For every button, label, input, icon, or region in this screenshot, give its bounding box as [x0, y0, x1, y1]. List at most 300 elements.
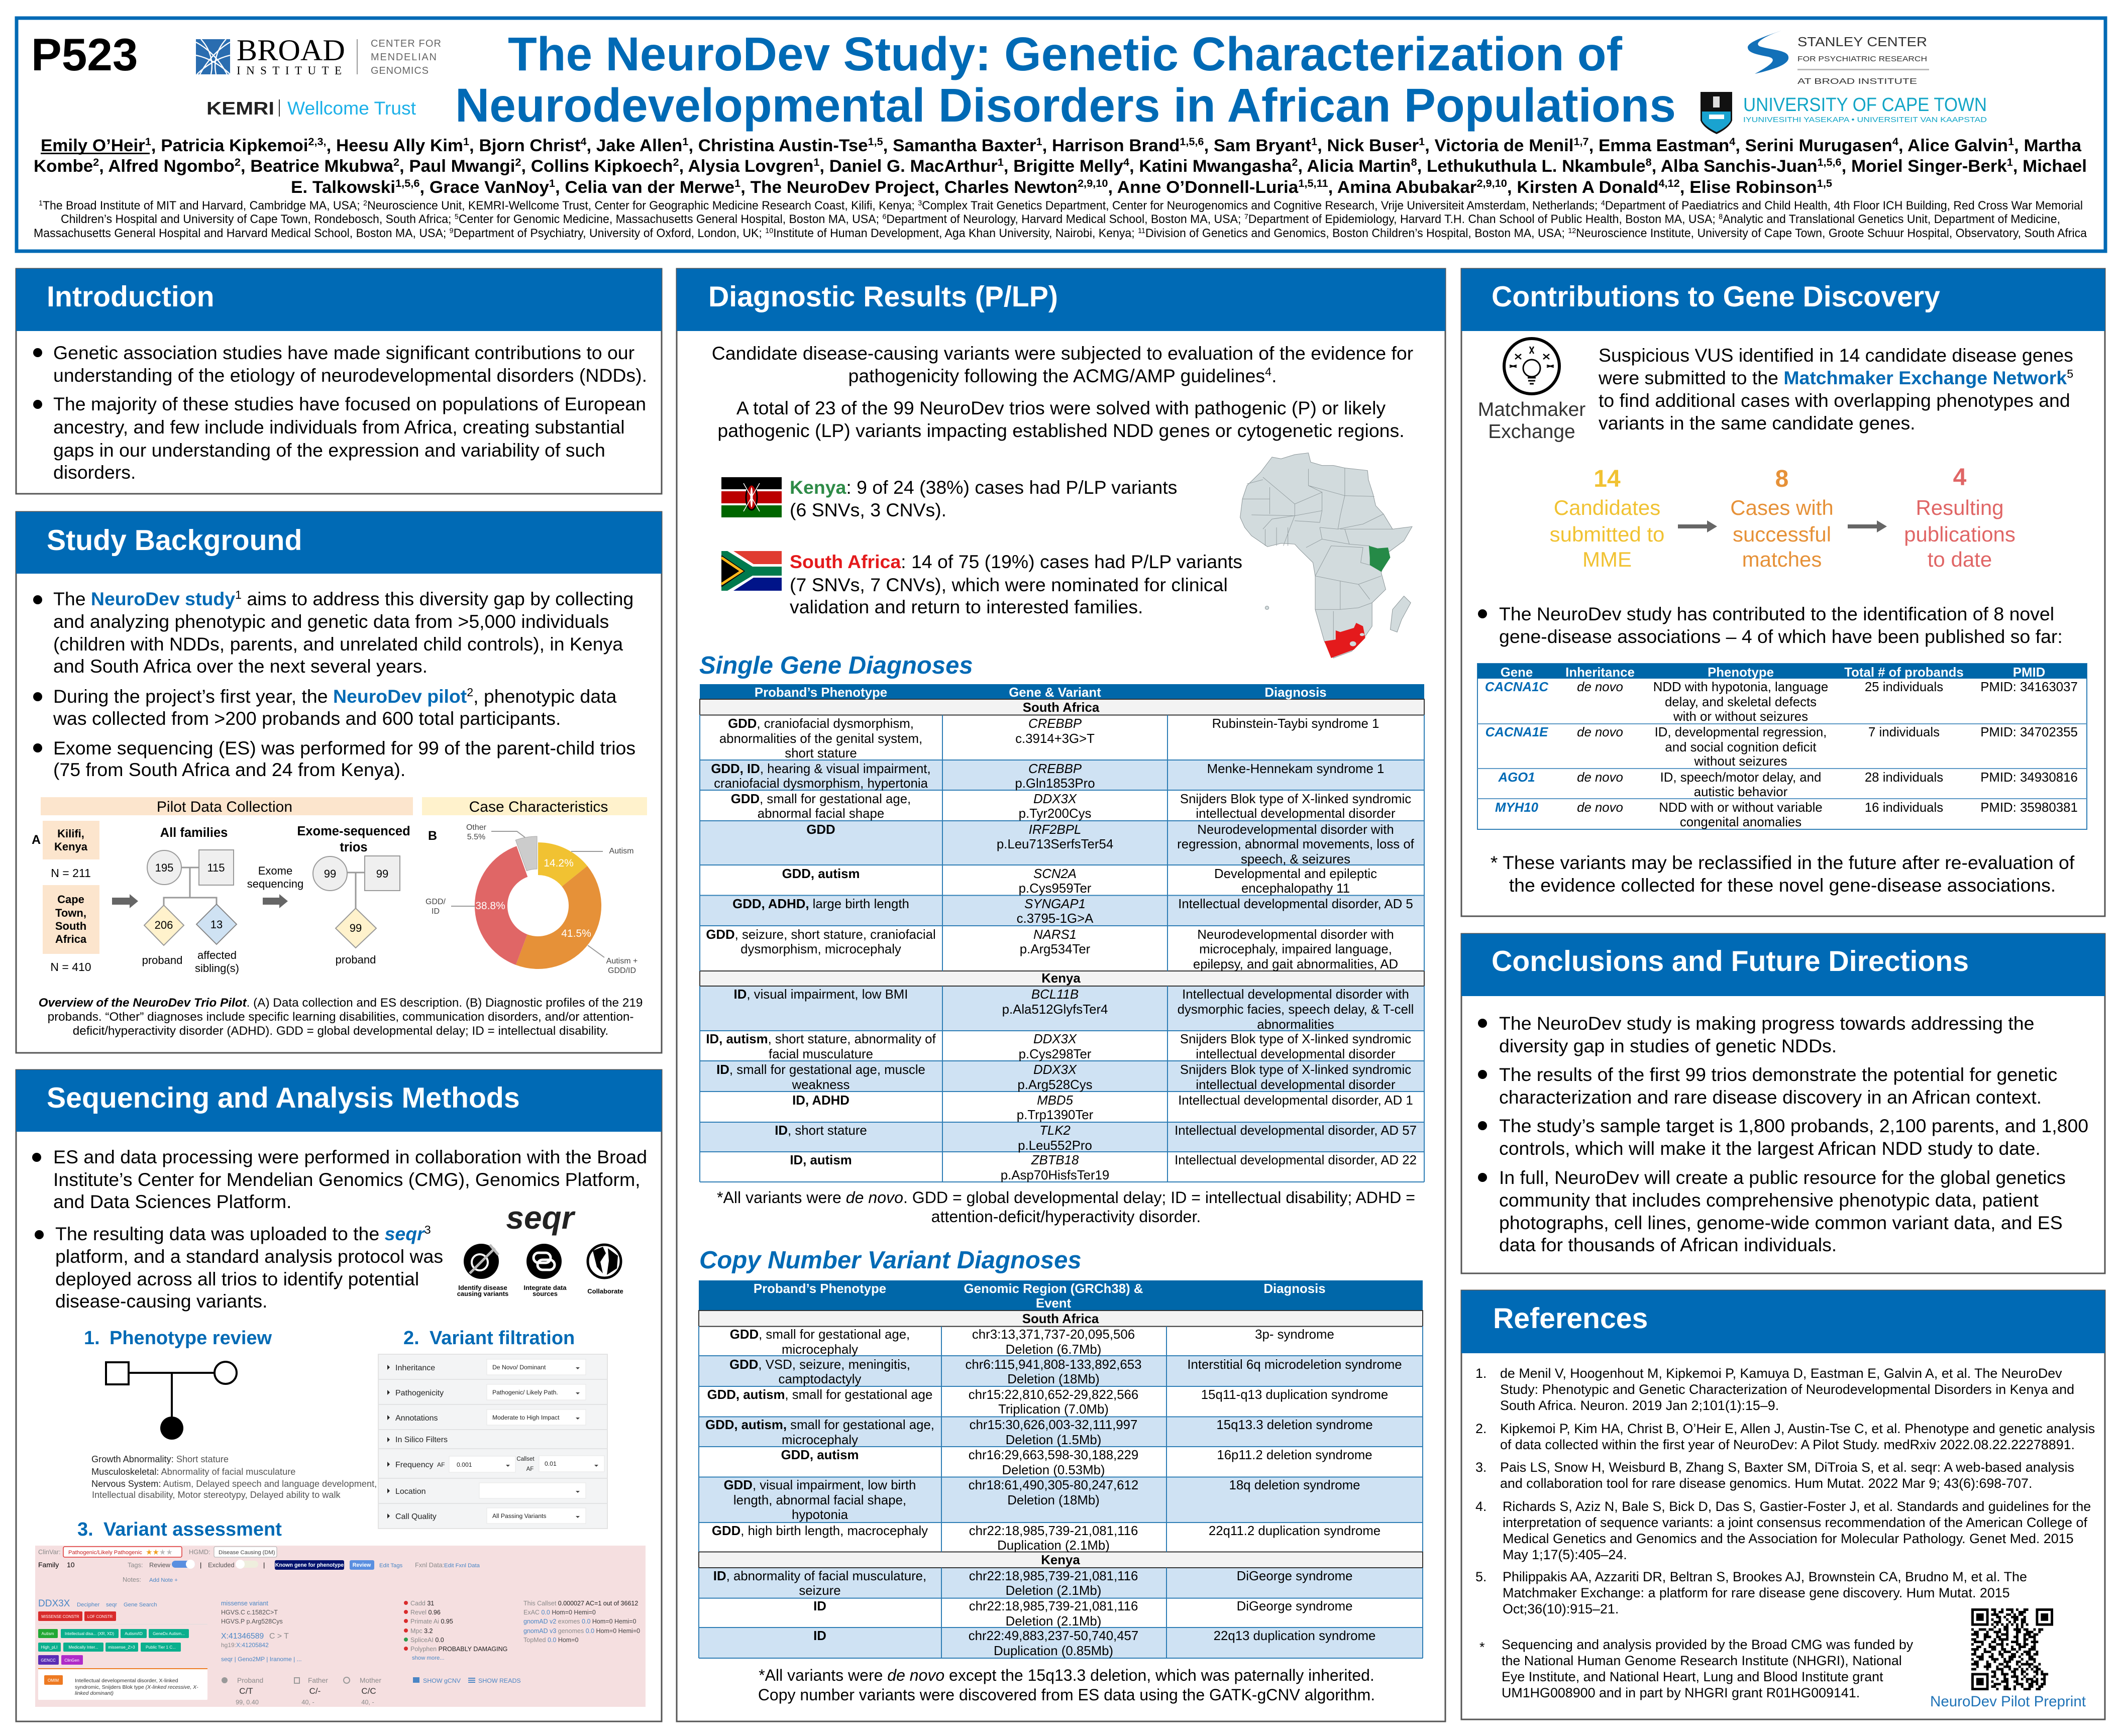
- heading: Study Background: [16, 512, 662, 574]
- footnote: single gene table: [717, 1188, 1415, 1226]
- table: single gene diagnoses: GDD, seizure, short stature, craniofacial: [706, 928, 936, 942]
- reference list: 4.: [1475, 1499, 1487, 1514]
- table: copy number variant diagnoses: ID: [813, 1599, 826, 1613]
- text: South Africa results: (7 SNVs, 7 CNVs), which were nominated for clinical: [790, 574, 1228, 595]
- seqr variant screenshot: Cadd 31: [410, 1600, 434, 1607]
- panel: Conclusions and Future Directions: [1461, 934, 2105, 1273]
- figure A: pilot data collection: N = 211: [51, 866, 91, 880]
- seqr variant screenshot: Review: [353, 1562, 371, 1568]
- affiliations: Massachusetts General Hospital and Harvard Medical School, Boston MA, USA; 9Department of Psychiatry, University of Oxford, London, UK; 10Institute of Human Development, Aga Khan University, Nairobi, Kenya; 11Division of Genetics and Genomics, Boston Children’s Hospital, Boston MA, USA; 12Neuroscience Institute, University of Cape Town, Groote Schuur Hospital, Observatory, South Africa: [34, 227, 2087, 240]
- seqr variant screenshot: Tags:: [128, 1561, 143, 1569]
- logo: KEMRI Wellcome Trust: KEMRI: [206, 98, 274, 119]
- table: single gene diagnoses: DDX3X: [1033, 792, 1078, 806]
- bullet list: disorders.: [53, 462, 136, 483]
- seqr variant screenshot: gnomAD v2 exomes 0.0 Hom=0 Hemi=0: [523, 1618, 636, 1625]
- bullet list: (children with NDDs, parents, and unrelated child controls), in Kenya: [53, 633, 623, 655]
- table: novel gene-disease associations: ID, developmental regression,: [1655, 725, 1827, 739]
- table: copy number variant diagnoses: South Africa: [1022, 1312, 1099, 1326]
- table: novel gene-disease associations: Phenotype: [1708, 666, 1774, 680]
- table: single gene diagnoses: GDD, craniofacial dysmorphism,: [728, 717, 914, 731]
- seqr variant screenshot: TopMed 0.0 Hom=0: [523, 1637, 579, 1644]
- table: single gene diagnoses: SYNGAP1: [1024, 897, 1086, 911]
- seqr variant screenshot: Gene Search: [124, 1602, 157, 1608]
- funding note: UM1HG008900 and in part by NHGRI grant R01HG009141.: [1502, 1685, 1860, 1700]
- table: novel gene-disease associations: de novo: [1577, 680, 1623, 694]
- figure B: case characteristics donut chart: [422, 797, 647, 975]
- intro text: [712, 343, 1413, 441]
- seqr variant screenshot: syndromic, Snijders Blok type (X-linked recessive, X-: [75, 1684, 198, 1690]
- bullet list: During the project’s first year, the NeuroDev pilot2, phenotypic data: [53, 686, 616, 707]
- figure A: pilot data collection: South: [55, 920, 86, 932]
- intro text: pathogenic (LP) variants impacting established NDD genes or cytogenetic regions.: [717, 420, 1405, 441]
- table: novel gene-disease associations: 7 individuals: [1868, 725, 1940, 739]
- logo: KEMRI Wellcome Trust: [206, 98, 416, 119]
- seqr variant screenshot: Family: [38, 1561, 59, 1569]
- bullet list: and South Africa over the next several years.: [53, 656, 428, 677]
- seqr variant screenshot: C/C: [361, 1686, 376, 1696]
- table: single gene diagnoses: intellectual developmental disorder: [1196, 807, 1396, 821]
- bullet list: [1478, 1013, 2088, 1255]
- step 3: variant assessment: Variant assessment: [103, 1519, 282, 1540]
- logo: Broad Institute CMG: INSTITUTE: [237, 64, 342, 77]
- filter form: Location: [395, 1487, 426, 1496]
- figure B: case characteristics donut chart: 5.5%: [467, 833, 485, 841]
- bullet list: data for thousands of African individuals.: [1499, 1234, 1837, 1255]
- seqr variant screenshot: ClinVar:: [38, 1548, 61, 1556]
- table: novel gene-disease associations: Total # of probands: [1844, 666, 1964, 680]
- table: novel gene-disease associations: delay, and skeletal defects: [1665, 695, 1817, 709]
- reference list: interpretation of sequence variants: a joint consensus recommendation of the American College of: [1503, 1515, 2087, 1530]
- seqr variant screenshot: Decipher: [77, 1602, 99, 1608]
- figure B: case characteristics donut chart: Other: [466, 823, 487, 832]
- footnote: CNV table: Copy number variants were discovered from ES data using the GATK-gCNV algorithm.: [758, 1686, 1375, 1704]
- authors: Kombe2, Alfred Ngombo2, Beatrice Mkubwa2, Paul Mwangi2, Collins Kipkoech2, Alysia Lovgren1, Daniel G. MacArthur1, Brigitte Melly4, Katini Mwangasha2, Alicia Martin8, Lethukuthula L. Nkambule8, Alba Sanchis-Juan1,5,6, Moriel Singer-Berk1, Michael: [34, 156, 2087, 176]
- table: novel gene-disease associations: de novo: [1577, 725, 1623, 739]
- bullet: ES and data processing: [32, 1146, 647, 1212]
- table: novel gene-disease associations: NDD with hypotonia, language: [1653, 680, 1828, 694]
- step 2: variant filtration: 2.: [403, 1328, 419, 1349]
- seqr variant screenshot: seqr: [106, 1602, 117, 1608]
- heading: Study Background: Study Background: [47, 524, 302, 557]
- figure A: pilot data collection: [32, 797, 413, 974]
- table: single gene diagnoses: Neurodevelopmental disorder with: [1197, 823, 1394, 837]
- reference list: 1.: [1475, 1366, 1487, 1381]
- logo: Matchmaker Exchange: Matchmaker: [1478, 399, 1585, 420]
- table: copy number variant diagnoses: ID: [813, 1629, 826, 1643]
- table: copy number variant diagnoses: chr18:61,490,305-80,247,612: [969, 1478, 1138, 1492]
- seqr variant screenshot: [35, 1546, 646, 1707]
- table: single gene diagnoses: p.Gln1853Pro: [1015, 777, 1095, 791]
- table: copy number variant diagnoses: 18q deletion syndrome: [1229, 1478, 1360, 1492]
- bullet list: diversity gap in studies of genetic NDDs.: [1499, 1035, 1837, 1056]
- logo: University of Cape Town: UNIVERSITY OF CAPE TOWN: [1743, 94, 1987, 116]
- icon: collaborate globe: Collaborate: [587, 1287, 623, 1295]
- table: copy number variant diagnoses: Deletion (18Mb): [1007, 1493, 1100, 1507]
- seqr variant screenshot: Public Tier 1 C...: [146, 1645, 176, 1650]
- table: copy number variant diagnoses: 15q13.3 deletion syndrome: [1216, 1418, 1373, 1432]
- figure A: pilot data collection: 206: [155, 919, 173, 931]
- table: novel gene-disease associations: MYH10: [1495, 801, 1539, 815]
- stat: 8 cases: [1730, 466, 1834, 571]
- bullet: seqr platform: deployed across all trios to identify potential: [55, 1268, 419, 1289]
- seqr variant screenshot: SHOW gCNV: [423, 1677, 461, 1684]
- figure A: pilot data collection: 99: [324, 867, 336, 880]
- table: copy number variant diagnoses: length, abnormal facial shape,: [733, 1493, 906, 1507]
- figure A: pilot data collection: 195: [155, 861, 173, 874]
- figure B: case characteristics donut chart: GDD/ID: [608, 966, 636, 975]
- stat: 4 publications: to date: [1928, 548, 1992, 571]
- seqr variant screenshot: OMIM: [48, 1678, 59, 1683]
- table: copy number variant diagnoses: [699, 1280, 1423, 1658]
- intro text: A total of 23 of the 99 NeuroDev trios were solved with pathogenic (P) or likely: [736, 397, 1386, 418]
- table: single gene diagnoses: speech, & seizures: [1241, 852, 1350, 866]
- table: single gene diagnoses: ID, short stature: [775, 1124, 867, 1138]
- text: Kenya results: [790, 477, 1177, 520]
- table: copy number variant diagnoses: GDD, VSD, seizure, meningitis,: [729, 1358, 910, 1372]
- funding note: [1479, 1637, 1914, 1700]
- table: single gene diagnoses: p.Cys298Ter: [1019, 1047, 1092, 1061]
- table: novel gene-disease associations: and social cognition deficit: [1665, 740, 1817, 754]
- logo: Broad Institute CMG: BROAD: [237, 34, 345, 67]
- icon: collaborate globe: [587, 1245, 623, 1295]
- seqr variant screenshot: 99, 0.40: [236, 1699, 259, 1706]
- logo: Matchmaker Exchange: Exchange: [1488, 421, 1575, 443]
- logo: KEMRI Wellcome Trust: Wellcome Trust: [287, 98, 416, 119]
- stat: 14 candidates: 14: [1594, 466, 1621, 492]
- logo: seqr: seqr: [506, 1200, 576, 1236]
- filter form: Pathogenic/ Likely Path.: [492, 1389, 558, 1396]
- table: copy number variant diagnoses: Duplication (0.85Mb): [994, 1644, 1113, 1658]
- reference list: 3.: [1475, 1460, 1487, 1475]
- stat: 8 cases: 8: [1775, 466, 1788, 492]
- table: single gene diagnoses: ID, autism, short stature, abnormality of: [706, 1032, 936, 1046]
- footnote: reclassification: [1491, 852, 2075, 896]
- seqr variant screenshot: ClinGen: [64, 1658, 79, 1663]
- seqr variant screenshot: linked dominant): [75, 1690, 114, 1696]
- bullet list: community that includes comprehensive phenotypic data, patient: [1499, 1189, 2039, 1211]
- QR code: [1971, 1609, 2052, 1689]
- table: copy number variant diagnoses: chr6:115,941,808-133,892,653: [966, 1358, 1141, 1372]
- seqr variant screenshot: X:41346589: [221, 1632, 264, 1641]
- seqr variant screenshot: HGVS.P p.Arg528Cys: [221, 1618, 283, 1625]
- seqr variant screenshot: hg19:X:41205842: [221, 1642, 269, 1649]
- seqr variant screenshot: Medically Inter...: [68, 1645, 98, 1650]
- table: novel gene-disease associations: ID, speech/motor delay, and: [1660, 771, 1821, 785]
- filter form: 0.001: [457, 1461, 472, 1468]
- text: Kenya results: (6 SNVs, 3 CNVs).: [790, 499, 946, 520]
- affiliations: [34, 199, 2087, 240]
- table: novel gene-disease associations: CACNA1E: [1486, 725, 1548, 739]
- heading: Conclusions and Future Directions: Conclusions and Future Directions: [1492, 945, 1969, 978]
- table: copy number variant diagnoses: GDD, autism, small for gestational age: [707, 1388, 932, 1402]
- table: copy number variant diagnoses: 22q13 duplication syndrome: [1214, 1629, 1375, 1643]
- heading: Single Gene Diagnoses: Single Gene Diagnoses: [699, 652, 973, 679]
- table: single gene diagnoses: ID, small for gestational age, muscle: [716, 1063, 925, 1077]
- table: novel gene-disease associations: Inheritance: [1565, 666, 1635, 680]
- filter form: De Novo/ Dominant: [492, 1364, 546, 1371]
- table: copy number variant diagnoses: GDD, high birth length, macrocephaly: [712, 1524, 928, 1538]
- bullet list: The results of the first 99 trios demonstrate the potential for genetic: [1499, 1064, 2057, 1085]
- table: novel gene-disease associations: without seizures: [1694, 754, 1787, 769]
- seqr variant screenshot: Revel 0.96: [410, 1609, 441, 1616]
- stat: 4 publications: publications: [1904, 522, 2015, 546]
- bullet: ES and data processing: Institute’s Center for Mendelian Genomics (CMG), Genomics Platform,: [53, 1169, 641, 1190]
- table: single gene diagnoses: p.Arg528Cys: [1017, 1078, 1093, 1092]
- stat: 8 cases: successful: [1733, 522, 1831, 546]
- reference list: and collaboration tool for rare disease genomics. Hum Mutat. 2022 Mar 9; 43(6):698-707.: [1500, 1476, 2032, 1491]
- intro text: pathogenicity following the ACMG/AMP guidelines4.: [848, 365, 1277, 386]
- stat: 4 publications: [1904, 464, 2015, 571]
- table: single gene diagnoses: regression, abnormal movements, loss of: [1177, 837, 1415, 851]
- bullet list: Exome sequencing (ES) was performed for 99 of the parent-child trios: [53, 737, 635, 758]
- table: copy number variant diagnoses: 3p- syndrome: [1255, 1328, 1334, 1342]
- table: copy number variant diagnoses: chr22:18,985,739-21,081,116: [969, 1569, 1138, 1583]
- arrow: [1848, 520, 1887, 532]
- table: copy number variant diagnoses: Proband’s Phenotype: [754, 1282, 886, 1296]
- reference list: Kipkemoi P, Kim HA, Christ B, O’Heir E, Allen J, Austin-Tse C, et al. Phenotype and genetic analysis: [1500, 1421, 2095, 1436]
- table: copy number variant diagnoses: chr3:13,371,737-20,095,506: [972, 1328, 1135, 1342]
- seqr variant screenshot: Excluded: [208, 1561, 235, 1569]
- table: copy number variant diagnoses: Deletion (18Mb): [1007, 1372, 1100, 1386]
- icon: Kenya flag: [721, 477, 782, 517]
- table: copy number variant diagnoses: Deletion (6.7Mb): [1006, 1343, 1101, 1357]
- logo: Stanley Center: AT BROAD INSTITUTE: [1797, 77, 1917, 86]
- intro text: Candidate disease-causing variants were subjected to evaluation of the evidence for: [712, 343, 1413, 364]
- table: single gene diagnoses: Snijders Blok type of X-linked syndromic: [1180, 1063, 1411, 1077]
- table: novel gene-disease associations: PMID: 34163037: [1980, 680, 2078, 694]
- figure B: case characteristics donut chart: Autism: [609, 847, 633, 855]
- table: copy number variant diagnoses: DiGeorge syndrome: [1237, 1599, 1352, 1613]
- heading: Diagnostic Results: [677, 269, 1445, 331]
- icon: identify disease causing variants: causing variants: [457, 1290, 508, 1297]
- poster header: [17, 18, 2105, 251]
- funding note: the National Human Genome Research Institute (NHGRI), National: [1502, 1653, 1902, 1668]
- seqr variant screenshot: Mother: [360, 1677, 381, 1684]
- bullet: ES and data processing: ES and data processing were performed in collaboration with the Broad: [53, 1146, 647, 1167]
- seqr variant screenshot: GENCC: [41, 1658, 56, 1663]
- filter form: 0.01: [545, 1460, 557, 1467]
- table: single gene diagnoses: Snijders Blok type of X-linked syndromic: [1180, 1032, 1411, 1046]
- table: novel gene-disease associations: 16 individuals: [1865, 801, 1943, 815]
- filter form: Pathogenicity: [395, 1389, 444, 1397]
- seqr variant screenshot: |: [263, 1561, 265, 1569]
- table: copy number variant diagnoses: camptodactyly: [779, 1372, 862, 1386]
- text: Matchmaker description: were submitted to the Matchmaker Exchange Network5: [1598, 367, 2073, 388]
- table: novel gene-disease associations: Gene: [1501, 666, 1533, 680]
- table: single gene diagnoses: DDX3X: [1033, 1063, 1078, 1077]
- table: single gene diagnoses: [700, 684, 1424, 1182]
- reference list: Matchmaker Exchange: a platform for rare disease gene discovery. Hum Mutat. 2015: [1503, 1585, 2010, 1600]
- table: copy number variant diagnoses: chr22:18,985,739-21,081,116: [969, 1524, 1138, 1538]
- logo: Matchmaker Exchange: [1478, 339, 1585, 443]
- seqr variant screenshot: Fxnl Data:: [415, 1561, 444, 1569]
- reference list: Philippakis AA, Azzariti DR, Beltran S, Brookes AJ, Brownstein CA, Brudno M, et al. The: [1503, 1569, 2027, 1584]
- bullet: seqr platform: disease-causing variants.: [55, 1290, 267, 1312]
- reference list: Richards S, Aziz N, Bale S, Bick D, Das S, Gastier-Foster J, et al. Standards and guidelines for the: [1503, 1499, 2091, 1514]
- bullet list: Genetic association studies have made significant contributions to our: [53, 342, 634, 363]
- seqr variant screenshot: Pathogenic/Likely Pathogenic: [68, 1550, 142, 1556]
- table: single gene diagnoses: weakness: [792, 1078, 850, 1092]
- table: novel gene-disease associations: PMID: 35980381: [1980, 801, 2078, 815]
- seqr variant screenshot: 10: [67, 1561, 75, 1569]
- seqr variant screenshot: ExAC 0.0 Hom=0 Hemi=0: [523, 1609, 596, 1616]
- table: single gene diagnoses: Kenya: [1041, 971, 1081, 986]
- table: single gene diagnoses: DDX3X: [1033, 1032, 1078, 1046]
- seqr variant screenshot: Mpc 3.2: [410, 1627, 433, 1635]
- table: single gene diagnoses: dysmorphic facies, speech delay, & T-cell: [1178, 1003, 1414, 1017]
- seqr variant screenshot: missense_Z>3: [108, 1645, 135, 1650]
- table: single gene diagnoses: MBD5: [1037, 1094, 1073, 1108]
- table: copy number variant diagnoses: Deletion (2.1Mb): [1006, 1584, 1101, 1598]
- icon: identify disease causing variants: Identify disease: [458, 1284, 507, 1291]
- bullet list: The NeuroDev study is making progress towards addressing the: [1499, 1013, 2034, 1034]
- table: novel gene-disease associations: autistic behavior: [1694, 785, 1788, 799]
- seqr variant screenshot: Edit Fxnl Data: [444, 1563, 480, 1569]
- seqr variant screenshot: Primate Ai 0.95: [410, 1618, 453, 1625]
- phenotype description: [91, 1454, 377, 1500]
- seqr variant screenshot: Autism: [41, 1632, 54, 1636]
- filter form: Frequency: [395, 1461, 434, 1469]
- seqr variant screenshot: GeneDx Autism...: [153, 1632, 185, 1636]
- step 1: phenotype review: Phenotype review: [110, 1328, 272, 1349]
- seqr variant screenshot: Disease Causing (DM): [219, 1550, 275, 1556]
- figure A: pilot data collection: Africa: [55, 933, 87, 945]
- text: Kenya results: Kenya: 9 of 24 (38%) cases had P/LP variants: [790, 477, 1177, 498]
- table: single gene diagnoses: p.Arg534Ter: [1020, 942, 1091, 956]
- affiliations: Children’s Hospital and University of Cape Town, Rondebosch, South Africa; 5Center for Genomic Medicine, Massachusetts General Hospital, Boston MA, USA; 6Department of Neurology, Harvard Medical School, Boston MA, USA; 7Department of Epidemiology, Harvard T.H. Chan School of Public Health, Boston MA, USA; 8Analytic and Translational Genetics Unit, Department of Medicine,: [61, 212, 2060, 226]
- bullet list: was collected from >200 probands and 600 total participants.: [53, 708, 561, 729]
- table: single gene diagnoses: GDD, small for gestational age,: [731, 792, 911, 806]
- funding note: Eye Institute, and National Heart, Lung and Blood Institute grant: [1502, 1669, 1883, 1684]
- table: single gene diagnoses: SCN2A: [1033, 867, 1077, 881]
- figure caption: Overview of the NeuroDev Trio Pilot. (A) Data collection and ES description. (B) Diagnostic profiles of the 219: [39, 996, 643, 1010]
- bullet list: The NeuroDev study1 aims to address this diversity gap by collecting: [53, 588, 633, 609]
- table: single gene diagnoses: GDD, autism: [782, 867, 860, 881]
- seqr variant screenshot: LOF CONSTR: [87, 1614, 113, 1619]
- seqr variant screenshot: 40, -: [301, 1699, 314, 1706]
- seqr variant screenshot: Known gene for phenotype: [275, 1562, 344, 1568]
- figure A: pilot data collection: proband: [336, 953, 376, 966]
- table: single gene diagnoses: dysmorphism, microcephaly: [740, 942, 901, 956]
- table: copy number variant diagnoses: Deletion (2.1Mb): [1006, 1614, 1101, 1629]
- seqr variant screenshot: High_pLI: [41, 1645, 57, 1650]
- table: copy number variant diagnoses: microcephaly: [782, 1343, 858, 1357]
- table: single gene diagnoses: BCL11B: [1031, 988, 1079, 1002]
- bullet: novel associations: The NeuroDev study has contributed to the identification of 8 novel: [1499, 603, 2054, 624]
- table: copy number variant diagnoses: Interstitial 6q microdeletion syndrome: [1187, 1358, 1402, 1372]
- heading: Diagnostic Results: Diagnostic Results (P/LP): [708, 281, 1058, 313]
- seqr variant screenshot: seqr | Geno2MP | Iranome | ...: [221, 1656, 302, 1663]
- figure B: case characteristics donut chart: ID: [432, 907, 440, 916]
- table: novel gene-disease associations: PMID: 34930816: [1980, 771, 2078, 785]
- table: copy number variant diagnoses: GDD, visual impairment, low birth: [724, 1478, 916, 1492]
- heading: Contributions to Gene Discovery: Contributions to Gene Discovery: [1492, 281, 1940, 313]
- heading: Copy Number Variant Diagnoses: Copy Number Variant Diagnoses: [699, 1247, 1082, 1274]
- text: Matchmaker description: [1598, 345, 2073, 433]
- table: single gene diagnoses: ID, ADHD: [792, 1094, 850, 1108]
- seqr variant screenshot: Father: [308, 1677, 328, 1684]
- table: copy number variant diagnoses: GDD, small for gestational age,: [730, 1328, 910, 1342]
- figure A: pilot data collection: sequencing: [247, 878, 303, 890]
- table: copy number variant diagnoses: hypotonia: [792, 1508, 848, 1522]
- logo: Stanley Center: STANLEY CENTER: [1797, 34, 1927, 49]
- figure A: pilot data collection: A: [32, 833, 41, 847]
- reference list: [1475, 1366, 2095, 1616]
- bullet list: characterization and rare disease discovery in an African context.: [1499, 1087, 2042, 1108]
- figure B: case characteristics donut chart: B: [428, 829, 437, 843]
- filter form: Inheritance: [395, 1364, 435, 1372]
- table: single gene diagnoses: Intellectual developmental disorder with: [1182, 988, 1409, 1002]
- table: copy number variant diagnoses: chr16:29,663,598-30,188,229: [969, 1448, 1138, 1462]
- title: Neurodevelopmental Disorders in African Populations: [455, 79, 1676, 132]
- table: single gene diagnoses: Intellectual developmental disorder, AD 22: [1175, 1153, 1417, 1167]
- seqr variant screenshot: MISSENSE CONSTR: [41, 1614, 79, 1619]
- panel: Diagnostic Results: [677, 269, 1445, 1721]
- table: single gene diagnoses: abnormal facial shape: [758, 807, 884, 821]
- text: Matchmaker description: Suspicious VUS identified in 14 candidate disease genes: [1599, 345, 2073, 366]
- table: novel gene-disease associations: AGO1: [1498, 771, 1535, 785]
- seqr variant screenshot: gnomAD v3 genomes 0.0 Hom=0 Hemi=0: [523, 1627, 640, 1635]
- table: copy number variant diagnoses: Deletion (0.53Mb): [1002, 1463, 1105, 1477]
- bullet list: (75 from South Africa and 24 from Kenya).: [53, 759, 405, 780]
- seqr variant screenshot: SHOW READS: [478, 1677, 521, 1684]
- seqr variant screenshot: Proband: [237, 1677, 263, 1684]
- table: copy number variant diagnoses: chr15:22,810,652-29,822,566: [969, 1388, 1138, 1402]
- table: single gene diagnoses: p.Tyr200Cys: [1019, 807, 1091, 821]
- seqr variant screenshot: Autism/ID: [125, 1632, 143, 1636]
- table: copy number variant diagnoses: Triplication (7.0Mb): [998, 1402, 1109, 1417]
- seqr variant screenshot: show more...: [412, 1655, 445, 1661]
- table: single gene diagnoses: GDD, ADHD, large birth length: [732, 897, 909, 911]
- figure A: pilot data collection: Pilot Data Collection: [157, 799, 292, 815]
- heading: Introduction: Introduction: [47, 281, 215, 313]
- table: copy number variant diagnoses: chr22:49,883,237-50,740,457: [969, 1629, 1138, 1643]
- seqr variant screenshot: DDX3X: [38, 1598, 70, 1609]
- panel: Contributions to Gene Discovery: [1461, 269, 2105, 916]
- authors: E. Talkowski1,5,6, Grace VanNoy1, Celia van der Merwe 1, The NeuroDev Project, Charles Newton 2,9,10, Anne O’Donnell-Luria 1,5,11, Amina Abubakar2,9,10, Kirsten A Donald4,12, Elise Robinson1,5: [291, 177, 1832, 197]
- seqr variant screenshot: Add Note +: [149, 1577, 178, 1583]
- figure A: pilot data collection: Exome-sequenced: [297, 824, 410, 838]
- figure A: pilot data collection: sibling(s): [195, 962, 239, 974]
- table: single gene diagnoses: NARS1: [1033, 928, 1077, 942]
- table: copy number variant diagnoses: chr15:30,626,003-32,111,997: [970, 1418, 1137, 1432]
- bullet list: gaps in our understanding of the expression and variability of such: [53, 440, 605, 461]
- filter form: AF: [437, 1461, 445, 1468]
- figure A: pilot data collection: affected: [197, 949, 237, 961]
- table: single gene diagnoses: p.Asp70HisfsTer19: [1001, 1168, 1109, 1182]
- table: single gene diagnoses: abnormalities: [1257, 1018, 1334, 1032]
- filter form: Annotations: [395, 1414, 438, 1423]
- panel: Introduction: [16, 269, 662, 494]
- table: single gene diagnoses: p.Ala512GlyfsTer4: [1002, 1003, 1108, 1017]
- panel: Study Background: [16, 512, 662, 1053]
- seqr variant screenshot: missense variant: [221, 1600, 268, 1607]
- seqr variant screenshot: HGVS.C c.1582C>T: [221, 1609, 278, 1616]
- table: single gene diagnoses: ID, visual impairment, low BMI: [734, 988, 908, 1002]
- figure B: case characteristics donut chart: Autism +: [606, 957, 638, 965]
- footnote: CNV table: *All variants were de novo except the 15q13.3 deletion, which was paternally inherited.: [759, 1666, 1374, 1684]
- table: novel gene-disease associations: CACNA1C: [1485, 680, 1548, 694]
- logo: University of Cape Town: IYUNIVESITHI YASEKAPA • UNIVERSITEIT VAN KAAPSTAD: [1743, 116, 1987, 124]
- logo: Stanley Center: FOR PSYCHIATRIC RESEARCH: [1797, 55, 1927, 63]
- bullet: seqr platform: platform, and a standard analysis protocol was: [55, 1246, 443, 1267]
- reference list: South Africa. Neuron. 2019 Jan 2;101(1):15–9.: [1500, 1398, 1779, 1413]
- table: single gene diagnoses: craniofacial dysmorphism, hypertonia: [714, 777, 928, 791]
- figure A: pilot data collection: 115: [207, 861, 225, 874]
- table: single gene diagnoses: Intellectual developmental disorder, AD 5: [1178, 897, 1413, 911]
- table: single gene diagnoses: p.Trp1390Ter: [1017, 1108, 1094, 1122]
- table: novel gene-disease associations: de novo: [1577, 771, 1623, 785]
